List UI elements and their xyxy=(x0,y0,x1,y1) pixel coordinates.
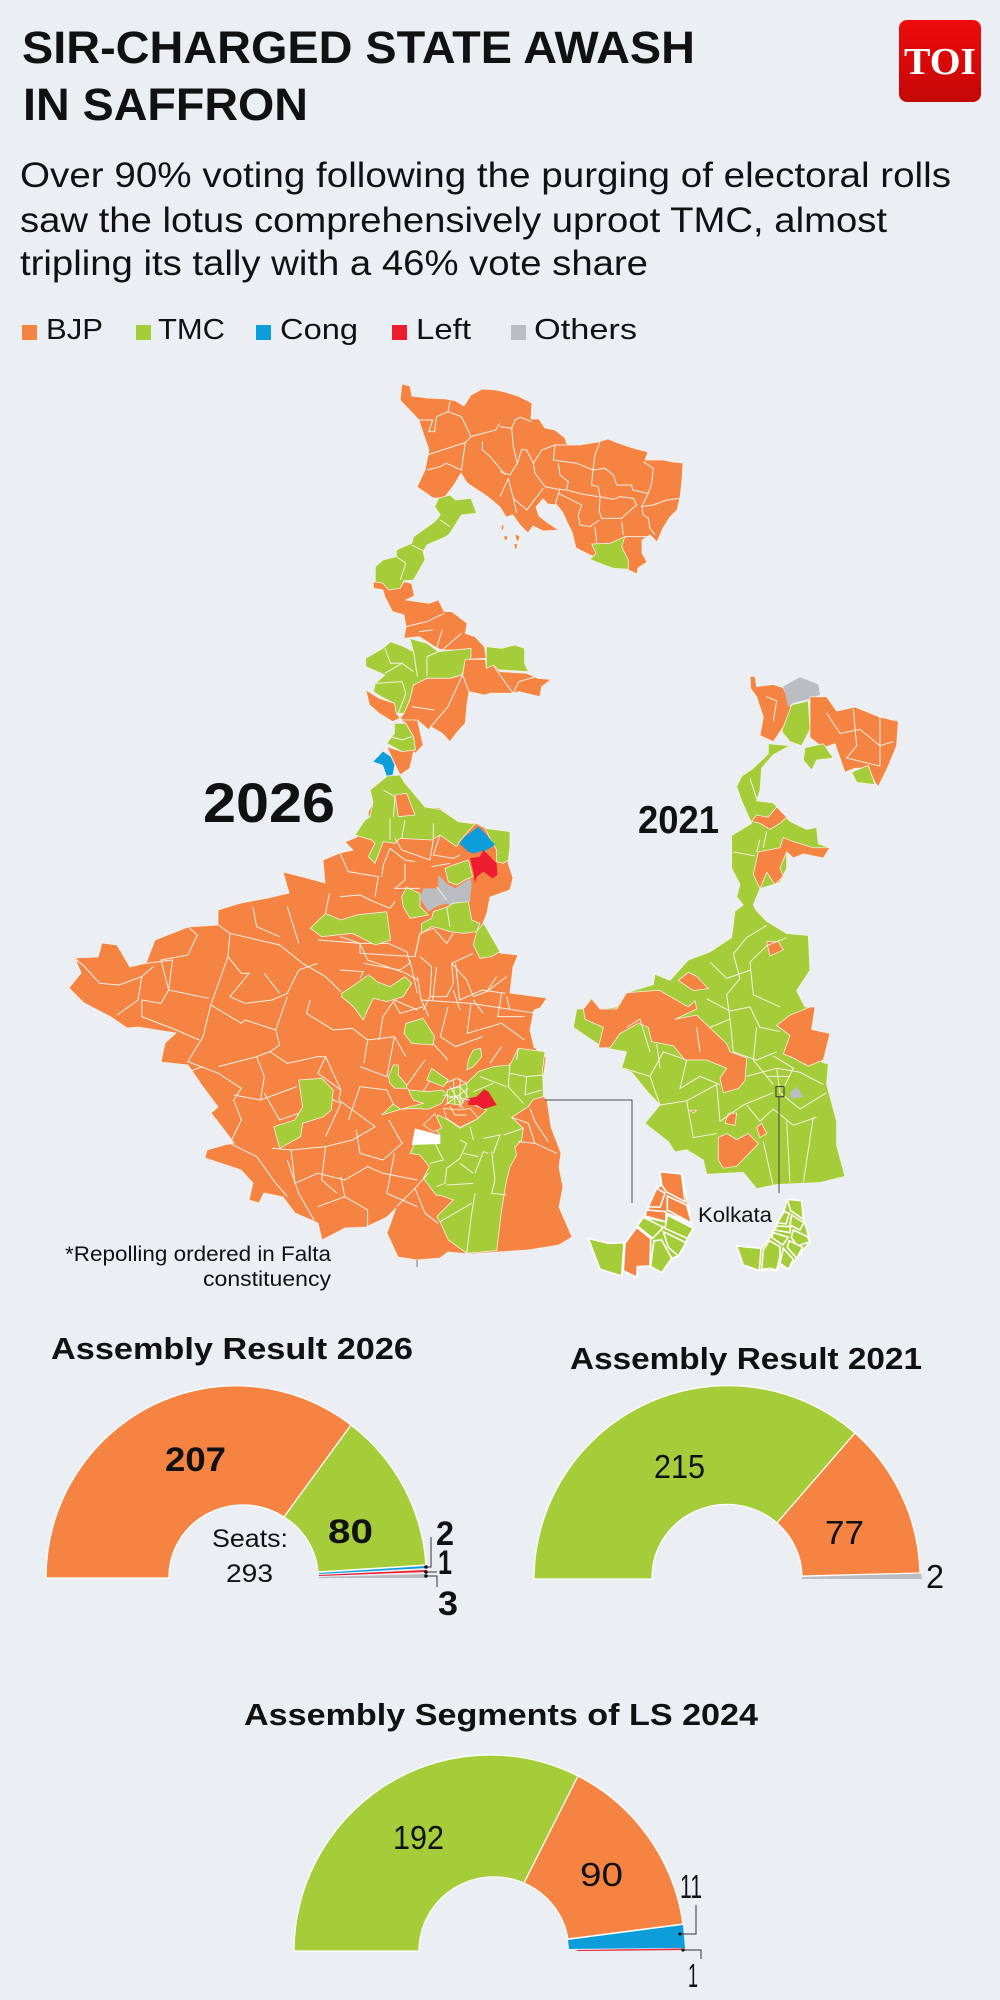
values xyxy=(165,1441,458,1623)
leader lines xyxy=(678,1905,701,1959)
north-central districts xyxy=(366,402,551,776)
values: 2 xyxy=(926,1558,944,1595)
north Bengal orange block xyxy=(400,384,683,574)
thin segments: Cong, Left, Others xyxy=(319,1566,426,1578)
2021 districts xyxy=(573,676,898,1189)
subtitle text: Over 90% voting following the purging of electoral rolls xyxy=(20,156,951,195)
inset map: Kolkata 2026 xyxy=(588,1172,693,1277)
Left seat, south xyxy=(468,1089,497,1109)
values xyxy=(654,1448,944,1595)
values: 77 xyxy=(825,1514,864,1551)
footnote xyxy=(65,1243,332,1291)
tick below map xyxy=(416,1260,418,1267)
segment: TMC 80 xyxy=(284,1425,426,1572)
heading: Assembly Segments of LS 2024 xyxy=(244,1697,759,1732)
segment: TMC 192 xyxy=(294,1755,578,1951)
segment: Left 1 xyxy=(577,1948,685,1951)
inset map: Kolkata 2021 xyxy=(737,1199,810,1271)
values xyxy=(393,1819,702,1994)
title: SIR-CHARGED STATE AWASH xyxy=(22,22,695,73)
segment: BJP 90 xyxy=(524,1776,683,1939)
leader line: 2026 Kolkata inset xyxy=(545,1100,632,1203)
values: 2 xyxy=(436,1515,454,1553)
legend: Left xyxy=(416,314,471,346)
chart: Assembly Segments of LS 2024 xyxy=(244,1697,759,1994)
map: 2021 result xyxy=(573,676,898,1189)
values: 3 xyxy=(438,1585,458,1623)
map: 2026 result xyxy=(69,384,683,1267)
centre label: seats: 293 xyxy=(226,1560,273,1588)
leader lines xyxy=(424,1537,437,1587)
values: 1 xyxy=(438,1544,452,1582)
north Bengal details xyxy=(500,417,680,569)
values: 90 xyxy=(580,1856,623,1893)
footnote: constituency xyxy=(203,1268,332,1291)
Falta repoll seat xyxy=(412,1128,440,1145)
south Bengal orange block xyxy=(69,775,572,1260)
Others seats xyxy=(420,875,472,912)
centre label: seats: Seats: xyxy=(212,1525,288,1553)
heading: Assembly Result 2021 xyxy=(570,1341,922,1376)
segment: BJP 77 xyxy=(777,1433,920,1576)
south Bengal delta districts xyxy=(382,1048,557,1253)
segment: TMC 215 xyxy=(534,1386,855,1579)
segment: Cong 11 xyxy=(568,1925,685,1949)
leader line: 2021 Kolkata inset xyxy=(778,1097,780,1193)
legend: BJP xyxy=(46,314,103,346)
segment: BJP 207 xyxy=(46,1386,351,1578)
chart: Assembly Result 2026 xyxy=(46,1331,458,1623)
heading: Assembly Result 2026 xyxy=(51,1331,413,1366)
icon: TOI logo xyxy=(899,20,981,102)
title: IN SAFFRON xyxy=(23,79,308,130)
subtitle text: saw the lotus comprehensively uproot TMC, almost xyxy=(20,201,887,240)
values: 192 xyxy=(393,1819,444,1856)
subtitle text: tripling its tally with a 46% vote share xyxy=(20,244,648,283)
footnote: *Repolling ordered in Falta xyxy=(65,1243,331,1266)
values: 1 xyxy=(688,1957,698,1994)
legend: Cong xyxy=(280,314,358,346)
Left seat, north xyxy=(470,850,497,883)
values: 207 xyxy=(165,1441,226,1479)
values: 80 xyxy=(328,1513,373,1551)
chart: Assembly Result 2021 xyxy=(534,1341,944,1595)
title xyxy=(22,22,695,130)
Kolkata locator box xyxy=(776,1087,784,1097)
label: Kolkata: Kolkata xyxy=(698,1204,772,1227)
icon: TOI logo: TOI xyxy=(904,41,976,83)
legend: Others xyxy=(534,314,637,346)
subtitle text xyxy=(20,156,951,283)
values: 215 xyxy=(654,1448,705,1485)
label: 2026: 2026 xyxy=(203,771,335,834)
Congress seat xyxy=(459,827,495,853)
legend: TMC xyxy=(158,314,225,346)
TMC districts, south-west xyxy=(274,912,435,1148)
segment: Others 2 xyxy=(802,1574,922,1579)
values: 11 xyxy=(680,1868,702,1905)
label: 2021: 2021 xyxy=(638,799,719,842)
centre label: seats xyxy=(212,1525,288,1588)
legend xyxy=(22,314,637,346)
south-west district boundaries xyxy=(75,893,536,1227)
TMC and other districts, central xyxy=(340,775,510,1020)
